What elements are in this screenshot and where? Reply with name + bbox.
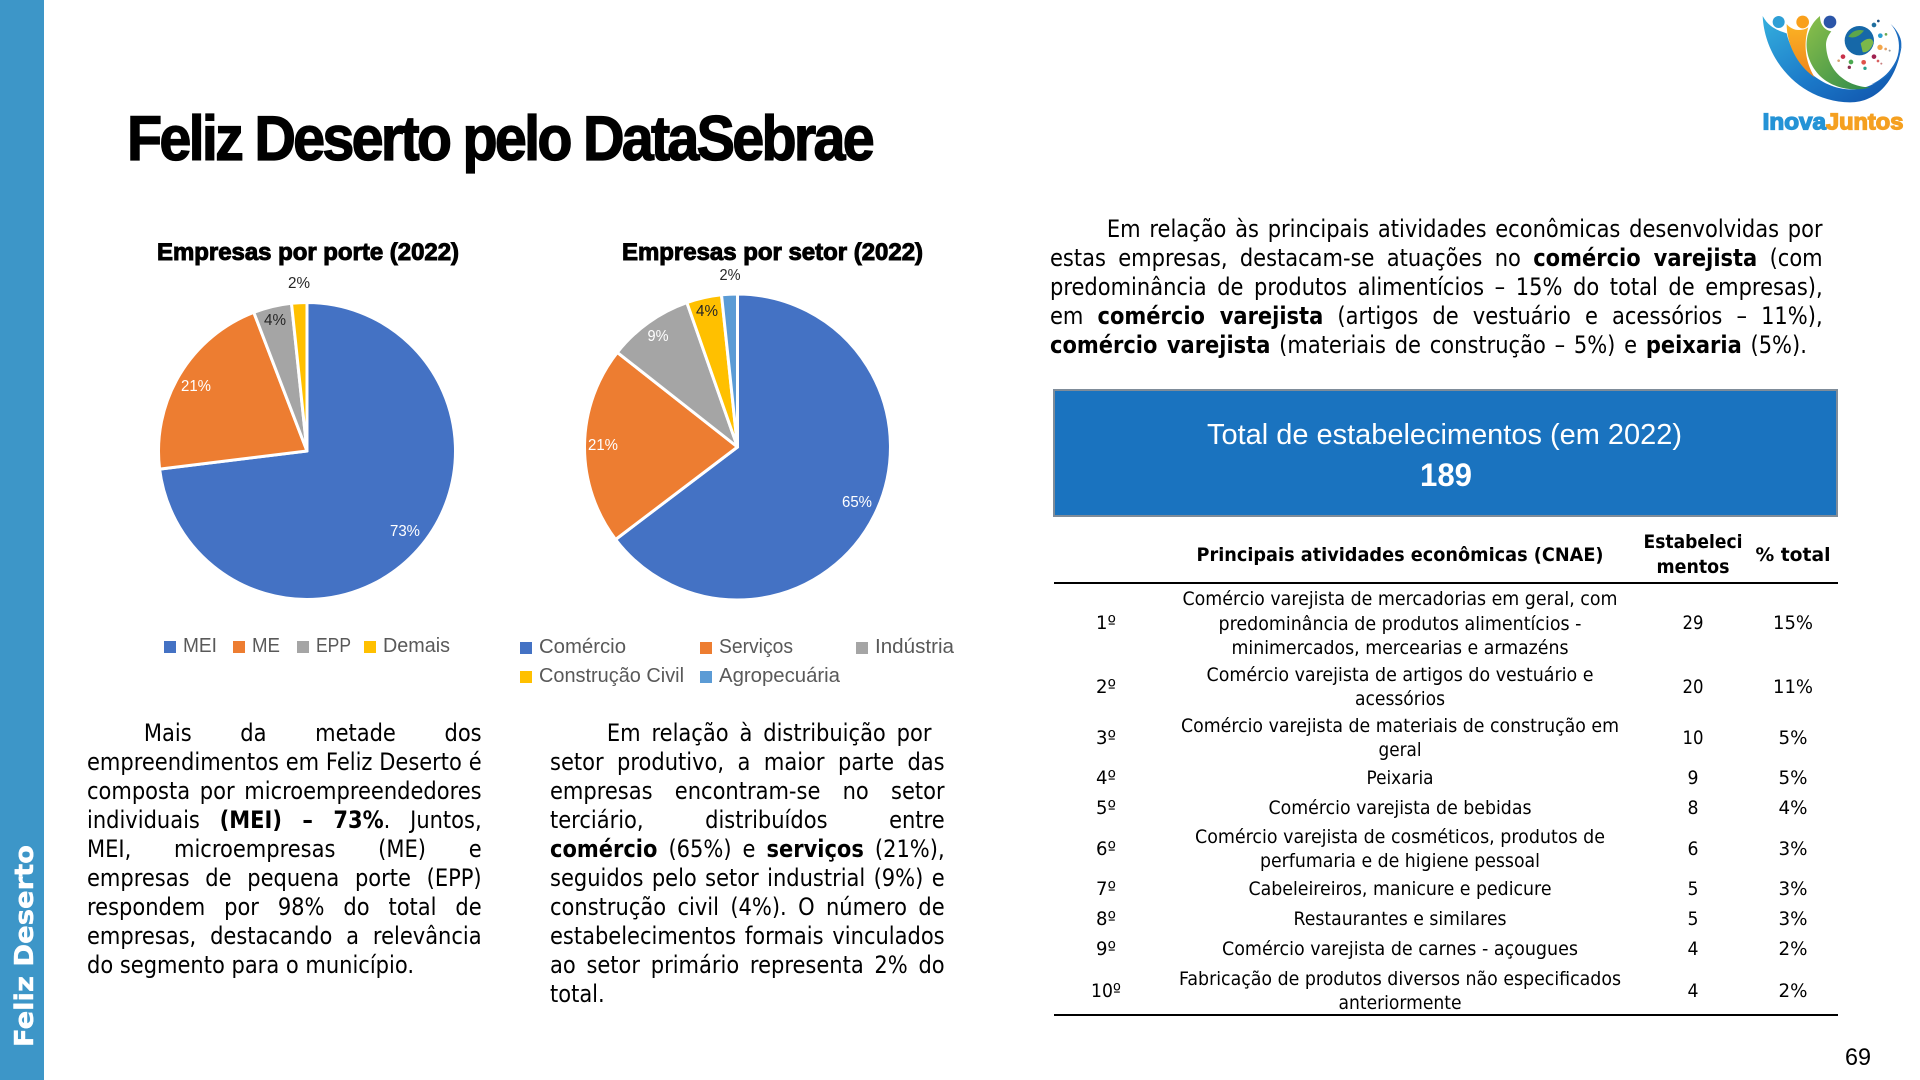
row 8: 8º: [1096, 908, 1116, 930]
row 3: 5%: [1778, 727, 1808, 749]
row 10: 4: [1688, 980, 1698, 1002]
chart title: porte: Empresas por porte (2022): [157, 239, 459, 266]
chart: Empresas por porte: [157, 239, 459, 657]
text block: porte: empresas, destacando a relevância: [87, 922, 482, 950]
row 6: 6: [1688, 838, 1698, 860]
row 6: 3%: [1778, 838, 1808, 860]
row 1: 1º: [1096, 612, 1116, 634]
text block: atividades econômicas: comércio varejista (materiais de construção – 5%) e peixaria (5%).: [1050, 331, 1807, 359]
row 1: minimercados, mercearias e armazéns: [1232, 637, 1568, 659]
text block: porte: respondem por 98% do total de: [87, 893, 482, 921]
text block: setor: ao setor primário representa 2% do: [550, 951, 945, 979]
row 9: 4: [1688, 938, 1698, 960]
row 4: 9: [1688, 767, 1698, 789]
row 3: [1096, 715, 1808, 761]
data labels: setor: [588, 267, 872, 511]
row 9: [1096, 938, 1808, 960]
legend: setor: [520, 636, 955, 687]
callout: total de estabelecimentos: [1054, 390, 1837, 516]
table header: Estabeleci: [1644, 531, 1742, 553]
data labels: porte: [181, 275, 420, 540]
table header: Principais atividades econômicas (CNAE): [1196, 544, 1604, 566]
row 1: Comércio varejista de mercadorias em geral, com: [1182, 588, 1618, 610]
row 4: Peixaria: [1366, 767, 1434, 789]
row 3: 3º: [1096, 727, 1116, 749]
row 6: perfumaria e de higiene pessoal: [1260, 850, 1540, 872]
row 3: geral: [1378, 739, 1422, 761]
table header: mentos: [1656, 556, 1730, 578]
text block: porte: individuais (MEI) – 73%. Juntos,: [87, 806, 482, 834]
row 1: predominância de produtos alimentícios -: [1218, 613, 1582, 635]
row 5: Comércio varejista de bebidas: [1268, 797, 1532, 819]
row 3: 10: [1682, 727, 1704, 749]
text block: setor: comércio (65%) e serviços (21%),: [550, 835, 945, 863]
legend: porte: ME: [252, 635, 280, 657]
legend: setor: Agropecuária: [719, 665, 841, 687]
table header: % total: [1756, 544, 1830, 566]
text block: setor: terciário, distribuídos entre: [550, 806, 945, 834]
logo: InovaJuntos: Juntos: [1826, 108, 1903, 134]
chart: Empresas por setor: [520, 239, 955, 687]
row 2: acessórios: [1355, 688, 1445, 710]
callout: total de estabelecimentos: 189: [1420, 457, 1472, 493]
data labels: porte: 21%: [181, 378, 211, 395]
text block: porte: do segmento para o município.: [87, 951, 414, 979]
row 7: 7º: [1096, 878, 1116, 900]
text block: porte: empreendimentos em Feliz Deserto é: [87, 748, 482, 776]
data labels: setor: 2%: [720, 267, 740, 284]
row 8: Restaurantes e similares: [1294, 908, 1506, 930]
logo: InovaJuntos: Inova: [1763, 108, 1826, 134]
row 6: 6º: [1096, 838, 1116, 860]
legend: porte: EPP: [316, 635, 351, 657]
row 5: 5º: [1096, 797, 1116, 819]
row 8: [1096, 908, 1808, 930]
data labels: setor: 21%: [588, 437, 618, 454]
data labels: porte: 2%: [288, 275, 310, 292]
text block: setor: estabelecimentos formais vinculados: [550, 922, 945, 950]
pie: setor: [585, 294, 890, 600]
row 10: anteriormente: [1338, 992, 1462, 1014]
table: principais atividades econômicas: [1054, 531, 1838, 1016]
text block: setor: empresas encontram-se no setor: [550, 777, 945, 805]
row 2: [1096, 664, 1813, 710]
row 5: [1096, 797, 1808, 819]
row 10: Fabricação de produtos diversos não especificados: [1179, 968, 1621, 990]
row 2: Comércio varejista de artigos do vestuário e: [1206, 664, 1594, 686]
row 4: 5%: [1778, 767, 1808, 789]
legend: setor: Comércio: [539, 636, 626, 658]
row 10: 2%: [1778, 980, 1808, 1002]
text block: porte: MEI, microempresas (ME) e: [87, 835, 482, 863]
pie: porte: [158, 302, 455, 600]
legend: porte: MEI: [183, 635, 217, 657]
row 3: Comércio varejista de materiais de construção em: [1181, 715, 1619, 737]
text block: atividades econômicas: predominância de produtos alimentícios – 15% do total de empresas),: [1050, 273, 1823, 301]
legend: setor: Serviços: [719, 636, 793, 658]
row 1: [1096, 588, 1813, 659]
text block: setor: total.: [550, 980, 605, 1008]
text block: porte: Mais da metade dos: [144, 719, 482, 747]
title: Feliz Deserto pelo DataSebrae: [127, 104, 873, 174]
row 7: Cabeleireiros, manicure e pedicure: [1248, 878, 1552, 900]
row 6: Comércio varejista de cosméticos, produtos de: [1195, 826, 1605, 848]
text block: atividades econômicas: Em relação às principais atividades econômicas desenvolvidas por: [1107, 215, 1823, 243]
text block: setor: setor produtivo, a maior parte das: [550, 748, 945, 776]
row 9: 9º: [1096, 938, 1116, 960]
row 8: 5: [1688, 908, 1698, 930]
row 6: [1096, 826, 1808, 872]
row 2: 11%: [1773, 676, 1813, 698]
row 9: Comércio varejista de carnes - açougues: [1222, 938, 1578, 960]
row 5: 8: [1688, 797, 1698, 819]
row 9: 2%: [1778, 938, 1808, 960]
row 2: 2º: [1096, 676, 1116, 698]
row 7: 5: [1688, 878, 1698, 900]
text block: atividades econômicas: [1050, 215, 1823, 359]
logo: InovaJuntos: [1763, 16, 1903, 134]
row 4: [1096, 767, 1808, 789]
chart title: setor: Empresas por setor (2022): [622, 239, 923, 266]
text block: setor: construção civil (4%). O número de: [550, 893, 945, 921]
row 10: 10º: [1091, 980, 1121, 1002]
sidebar label: Feliz Deserto: [10, 845, 40, 1047]
legend: setor: Construção Civil: [539, 665, 684, 687]
text block: setor: [550, 719, 945, 1008]
row 10: [1091, 968, 1808, 1014]
text block: atividades econômicas: estas empresas, destacam-se atuações no comércio varejista (com: [1050, 244, 1823, 272]
row 8: 3%: [1778, 908, 1808, 930]
data labels: setor: 9%: [648, 328, 668, 345]
row 1: 29: [1682, 612, 1704, 634]
data labels: setor: 4%: [696, 303, 718, 320]
row 5: 4%: [1778, 797, 1808, 819]
text block: porte: [87, 719, 482, 979]
row 1: 15%: [1773, 612, 1813, 634]
row 7: 3%: [1778, 878, 1808, 900]
data labels: porte: 4%: [264, 312, 286, 329]
text block: setor: seguidos pelo setor industrial (9%) e: [550, 864, 945, 892]
sidebar: [0, 0, 44, 1080]
legend: porte: [164, 635, 450, 657]
text block: atividades econômicas: em comércio varejista (artigos de vestuário e acessórios – 11%),: [1050, 302, 1823, 330]
row 7: [1096, 878, 1808, 900]
callout: total de estabelecimentos: Total de estabelecimentos (em 2022): [1207, 419, 1682, 451]
text block: setor: Em relação à distribuição por: [607, 719, 932, 747]
legend: porte: Demais: [383, 635, 450, 657]
table header: [1196, 531, 1830, 578]
legend: setor: Indústria: [875, 636, 955, 658]
row 4: 4º: [1096, 767, 1116, 789]
text block: porte: empresas de pequena porte (EPP): [87, 864, 482, 892]
row 2: 20: [1682, 676, 1704, 698]
page number: 69: [1845, 1044, 1871, 1071]
data labels: porte: 73%: [390, 523, 420, 540]
data labels: setor: 65%: [842, 494, 872, 511]
text block: porte: composta por microempreendedores: [87, 777, 482, 805]
